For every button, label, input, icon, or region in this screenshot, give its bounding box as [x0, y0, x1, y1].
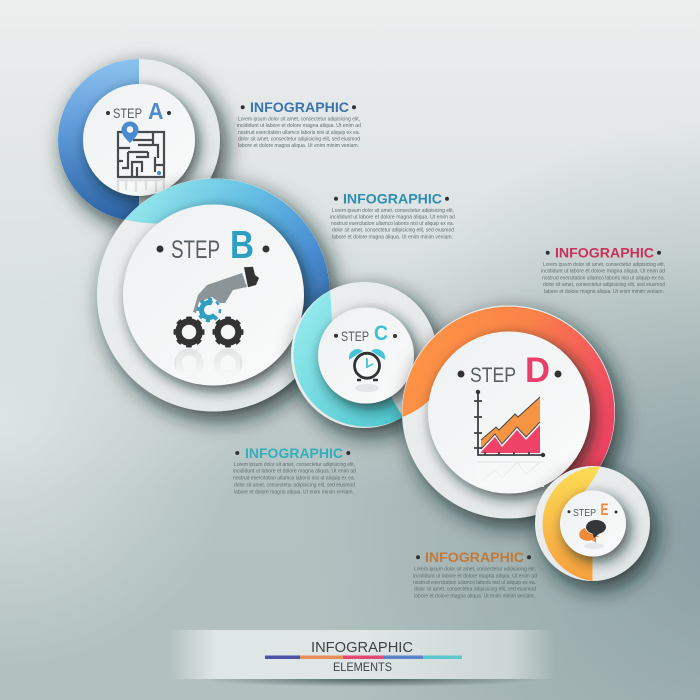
text block A: labore et dolore magna aliqua. Ut enim minim veniam. [238, 143, 359, 149]
footer banner: ELEMENTS [333, 660, 392, 674]
step D label [458, 351, 562, 390]
text block E [413, 549, 537, 599]
icon: maze with pin [118, 122, 164, 192]
step E label: STEP [573, 507, 596, 519]
icon: hand placing gear [175, 267, 259, 377]
text block B: labore et dolore magna aliqua. Ut enim minim veniam. [332, 234, 453, 240]
text block E: incididunt ut labore et dolore magna aliqua. Ut enim ad [413, 573, 537, 579]
text block D: nostrud exercitation ullamco laboris nisi ut aliquip ex ea. [542, 275, 665, 281]
icon: alarm clock [350, 350, 384, 392]
text block B: INFOGRAPHIC [343, 190, 442, 206]
text block D: INFOGRAPHIC [555, 244, 654, 260]
step E label: E [600, 501, 608, 519]
text block D: incididunt ut labore et dolore magna aliqua. Ut enim ad [541, 268, 665, 274]
text block C: INFOGRAPHIC [245, 445, 343, 461]
text block A: incididunt ut labore et dolore magna aliqua. Ut enim ad [237, 123, 361, 129]
text block C: incididunt ut labore et dolore magna aliqua. Ut enim ad [233, 469, 356, 475]
step A label [106, 98, 171, 124]
text block A [237, 99, 361, 149]
text block B: nostrud exercitation ullamco laboris nisi ut aliquip ex ea. [331, 221, 454, 227]
text block B: Lorem ipsum dolor sit amet, consectetur adipisicing elit, [332, 208, 454, 214]
text block D: Lorem ipsum dolor sit amet, consectetur adipisicing elit, [543, 262, 665, 268]
text block A: dolor sit amet, consectetur adipisicing elit, sed eiusmod [238, 136, 360, 142]
step E label [568, 501, 618, 519]
text block C: dolor sit amet, consectetur adipisicing elit, sed eiusmod [234, 483, 355, 489]
text block D: dolor sit amet, consectetur adipisicing elit, sed eiusmod [543, 282, 665, 288]
step E circle [535, 466, 650, 581]
text block E: labore et dolore magna aliqua. Ut enim minim veniam. [414, 593, 535, 599]
text block D [541, 244, 665, 295]
text block E: dolor sit amet, consectetur adipisicing elit, sed eiusmod [414, 587, 536, 593]
text block E: nostrud exercitation ullamco laboris nisi ut aliquip ex ea. [413, 580, 536, 586]
step C label: C [374, 322, 388, 345]
text block E: Lorem ipsum dolor sit amet, consectetur adipisicing elit, [414, 567, 536, 573]
icon: area chart [474, 390, 545, 487]
text block C: nostrud exercitation ullamco laboris nisi ut aliquip ex ea. [233, 475, 355, 481]
text block C [233, 445, 356, 495]
text block A: Lorem ipsum dolor sit amet, consectetur adipisicing elit, [238, 116, 360, 122]
text block B [330, 190, 455, 240]
text block C: labore et dolore magna aliqua. Ut enim minim veniam. [234, 489, 354, 495]
step C label [334, 322, 397, 345]
step D circle [402, 306, 615, 518]
step C circle [291, 282, 437, 428]
step D label: STEP [470, 364, 516, 387]
text block B: dolor sit amet, consectetur adipisicing elit, sed eiusmod [332, 228, 454, 234]
step A label: A [148, 98, 164, 124]
step B label [156, 224, 270, 267]
step B circle [97, 178, 330, 412]
text block D: labore et dolore magna aliqua. Ut enim minim veniam. [544, 289, 664, 295]
text block B: incididunt ut labore et dolore magna aliqua. Ut enim ad [330, 214, 455, 220]
text block C: Lorem ipsum dolor sit amet, consectetur adipisicing elit, [234, 462, 355, 468]
footer banner: INFOGRAPHIC [311, 640, 413, 656]
step A circle [58, 59, 220, 221]
text block A: nostrud exercitation ullamco laboris nisi ut aliquip ex ea. [238, 130, 360, 136]
footer banner [170, 630, 556, 695]
step B label: B [230, 224, 254, 267]
text block E: INFOGRAPHIC [425, 549, 524, 565]
step C label: STEP [341, 329, 369, 344]
step D label: D [525, 351, 550, 390]
text block A: INFOGRAPHIC [250, 99, 349, 115]
step B label: STEP [171, 236, 220, 264]
step A label: STEP [113, 105, 142, 121]
icon: speech bubbles [579, 520, 606, 549]
